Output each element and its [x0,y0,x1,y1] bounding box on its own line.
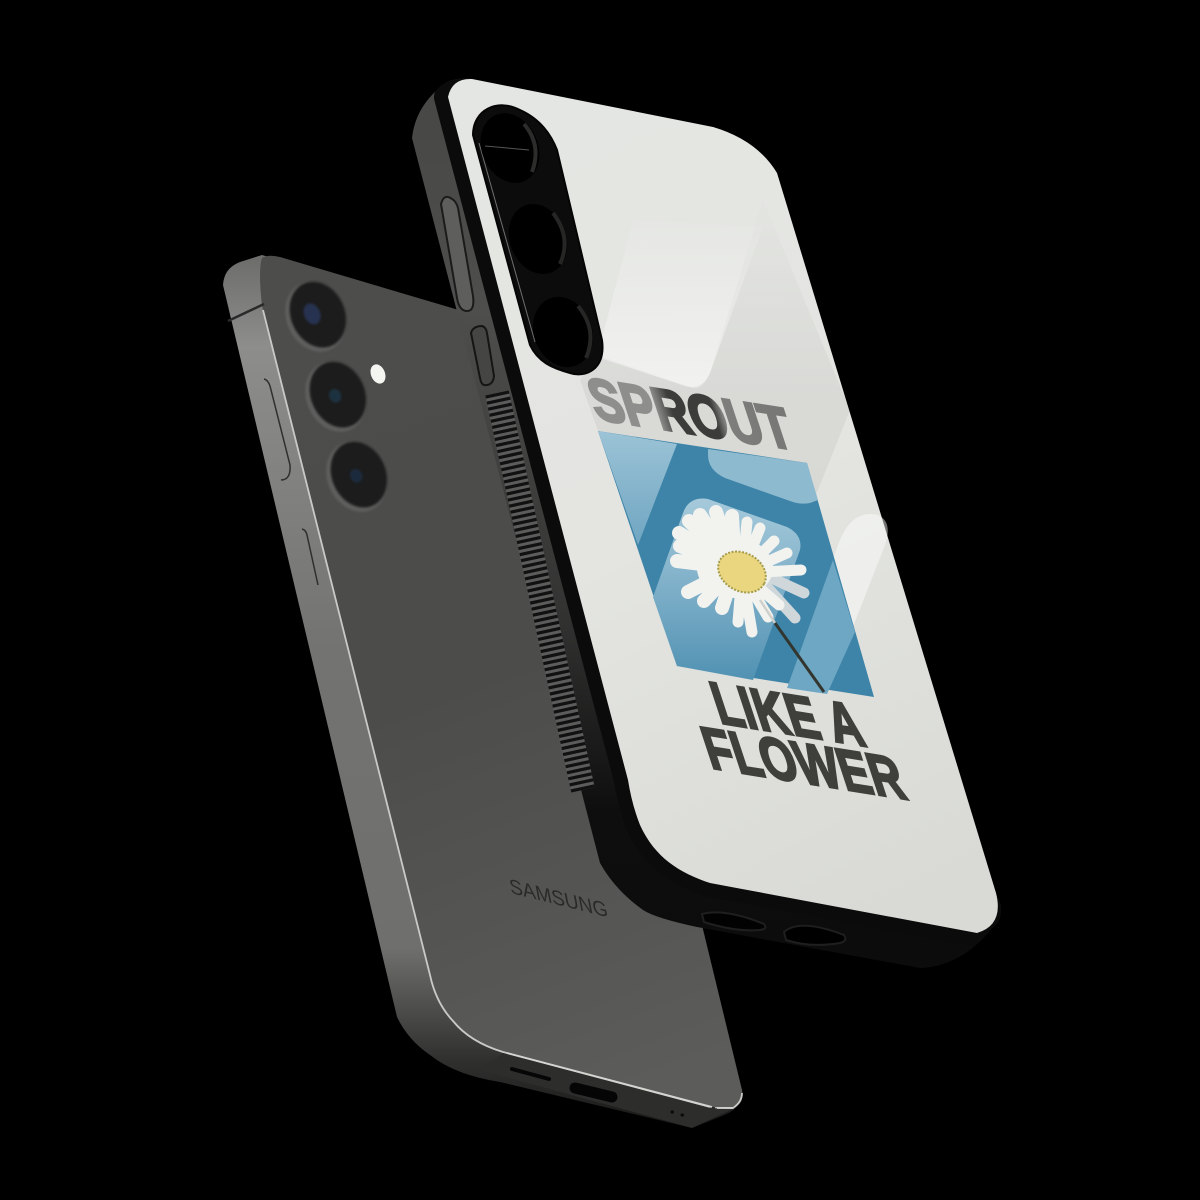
speaker slot [512,1069,549,1079]
case black rim [434,78,877,784]
lower side button outline [302,529,318,585]
daisy: stem [760,600,824,692]
camera lens 2 [294,352,378,441]
headline: flower: FLOWER [693,715,913,813]
brand wordmark: SAMSUNG [507,874,610,922]
port cut-out 2 [784,926,845,945]
blue panel base [598,431,874,697]
side button outline [264,379,290,480]
daisy: white petals [677,512,801,632]
lens hole 1 [470,104,550,192]
bottom highlight [507,1053,733,1108]
camera flash [368,362,388,386]
camera lens 1 [274,272,358,361]
right reflection pill [787,514,888,693]
camera cut-out plate [470,104,603,376]
sim dots [672,1112,682,1115]
usb port [575,1088,612,1097]
plate edge highlight [479,143,535,342]
artwork [598,431,874,697]
panel edge highlight [263,310,742,1108]
blue panel centre light [653,499,800,680]
soft shadow band [580,200,850,505]
headline: like a: LIKE A [702,670,872,760]
grip ridges [497,393,583,790]
port cut-out 1 [702,912,765,930]
lens hole 2 [499,195,577,283]
power button [471,326,494,385]
phone frame edge [223,255,742,1128]
blue panel right strip [787,560,855,694]
soft reflection panel [597,220,763,387]
daisy: centre [711,543,773,601]
product scene [223,78,1001,1128]
bottom frame [480,1053,733,1128]
blue panel upper left light [598,431,677,545]
antenna line [228,304,264,321]
daisy: rear petals [765,575,804,618]
headline: sprout: SPROUT [579,366,802,464]
printed case face [448,79,998,933]
blue panel upper right light [708,449,818,504]
rear panel [260,256,742,1108]
phone: back view [223,255,742,1128]
volume button [441,197,473,311]
camera lens 3 [315,432,399,521]
lens hole 3 [523,288,603,376]
case outer shell [412,78,1001,968]
phone: front case view [412,78,1001,968]
